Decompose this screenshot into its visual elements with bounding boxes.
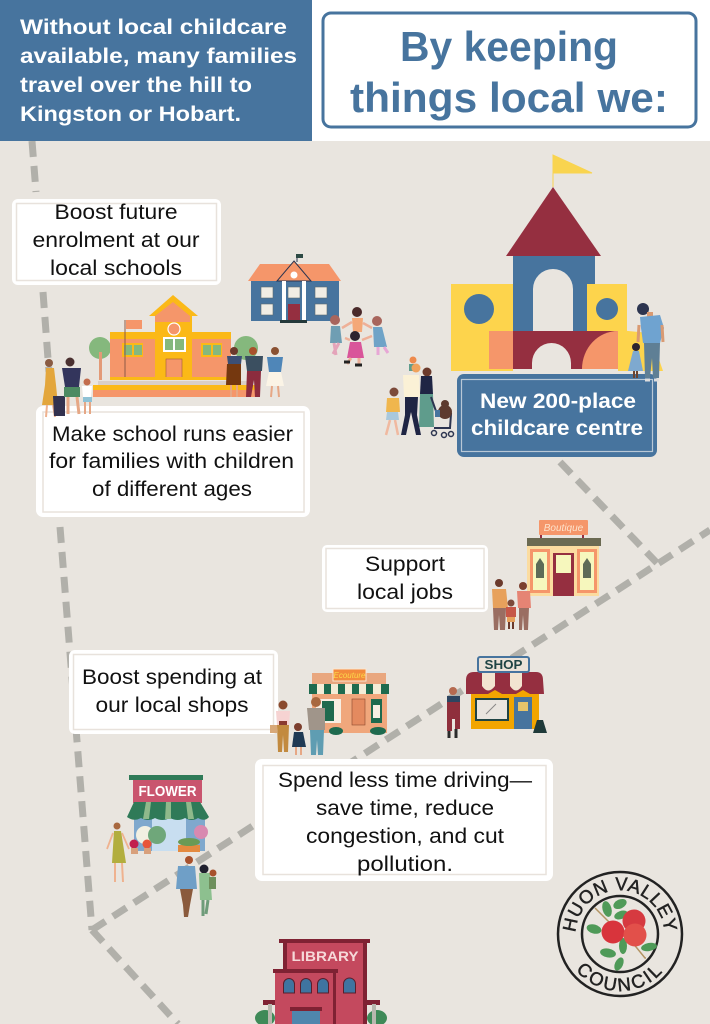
panel: boost enrolment: Boost future [54, 201, 178, 224]
illustration: man by shop [447, 687, 460, 738]
panel: title: things local we: [350, 74, 668, 121]
illustration: library: LIBRARY [292, 948, 359, 964]
illustration: library [255, 939, 387, 1024]
panel: spend less time driving: pollution. [357, 853, 453, 876]
illustration: family with stroller [386, 356, 454, 438]
illustration: shop [466, 657, 547, 733]
illustration: orange school [89, 295, 258, 397]
panel: header intro: available, many families [20, 45, 297, 68]
illustration: family beside school [42, 358, 92, 417]
panel: boost enrolment: enrolment at our [32, 229, 200, 252]
panel: title [312, 0, 710, 141]
illustration: flower shop: FLOWER [138, 783, 197, 800]
panel: header intro: travel over the hill to [20, 74, 252, 97]
illustration: woman by flower shop [107, 822, 129, 882]
illustration: family by boutique [492, 579, 531, 630]
panel: boost enrolment [12, 199, 221, 285]
panel: childcare centre label: childcare centre [471, 417, 643, 440]
illustration: flower shop [127, 775, 209, 854]
panel: header intro: Kingston or Hobart. [20, 103, 241, 126]
panel: easier school runs: of different ages [92, 478, 252, 501]
panel: header intro [0, 0, 312, 141]
panel: header intro: Without local childcare [20, 16, 287, 39]
logo: Huon Valley Council: HUON VALLEY [562, 877, 678, 932]
panel: easier school runs: for families with children [49, 450, 294, 473]
illustration: children playing in a circle [330, 307, 388, 365]
panel: childcare centre label [457, 374, 657, 457]
panel: support local jobs: local jobs [357, 581, 453, 604]
illustration: students with books [226, 347, 284, 397]
logo: Huon Valley Council: COUNCIL [578, 964, 662, 992]
panel: boost spending: Boost spending at [82, 666, 262, 689]
panel: easier school runs: Make school runs easier [52, 423, 293, 446]
illustration: couple walking with child [176, 856, 216, 917]
panel: spend less time driving [255, 759, 553, 881]
illustration: couture shop [309, 669, 389, 735]
panel: boost spending [69, 650, 278, 734]
panel: boost enrolment: local schools [50, 257, 182, 280]
illustration: boutique [527, 520, 601, 596]
logo: Huon Valley Council [556, 870, 684, 998]
panel: title: By keeping [400, 23, 618, 70]
illustration: father and child at centre [628, 303, 664, 380]
illustration: blue school [248, 254, 341, 323]
panel: support local jobs [322, 545, 488, 612]
illustration: couture shop: Ecouture [333, 671, 366, 680]
illustration: toy block childcare centre [451, 155, 663, 371]
panel: spend less time driving: congestion, and cut [306, 825, 504, 848]
panel: spend less time driving: save time, reduce [316, 797, 494, 820]
illustration: boutique: Boutique [544, 523, 584, 534]
illustration: family by couture shop [270, 697, 325, 755]
panel: boost spending: our local shops [96, 694, 248, 717]
panel: childcare centre label: New 200-place [480, 390, 636, 413]
panel: support local jobs: Support [365, 553, 445, 576]
illustration: shop: SHOP [484, 658, 522, 672]
panel: easier school runs [36, 406, 310, 517]
panel: spend less time driving: Spend less time driving— [278, 769, 532, 792]
